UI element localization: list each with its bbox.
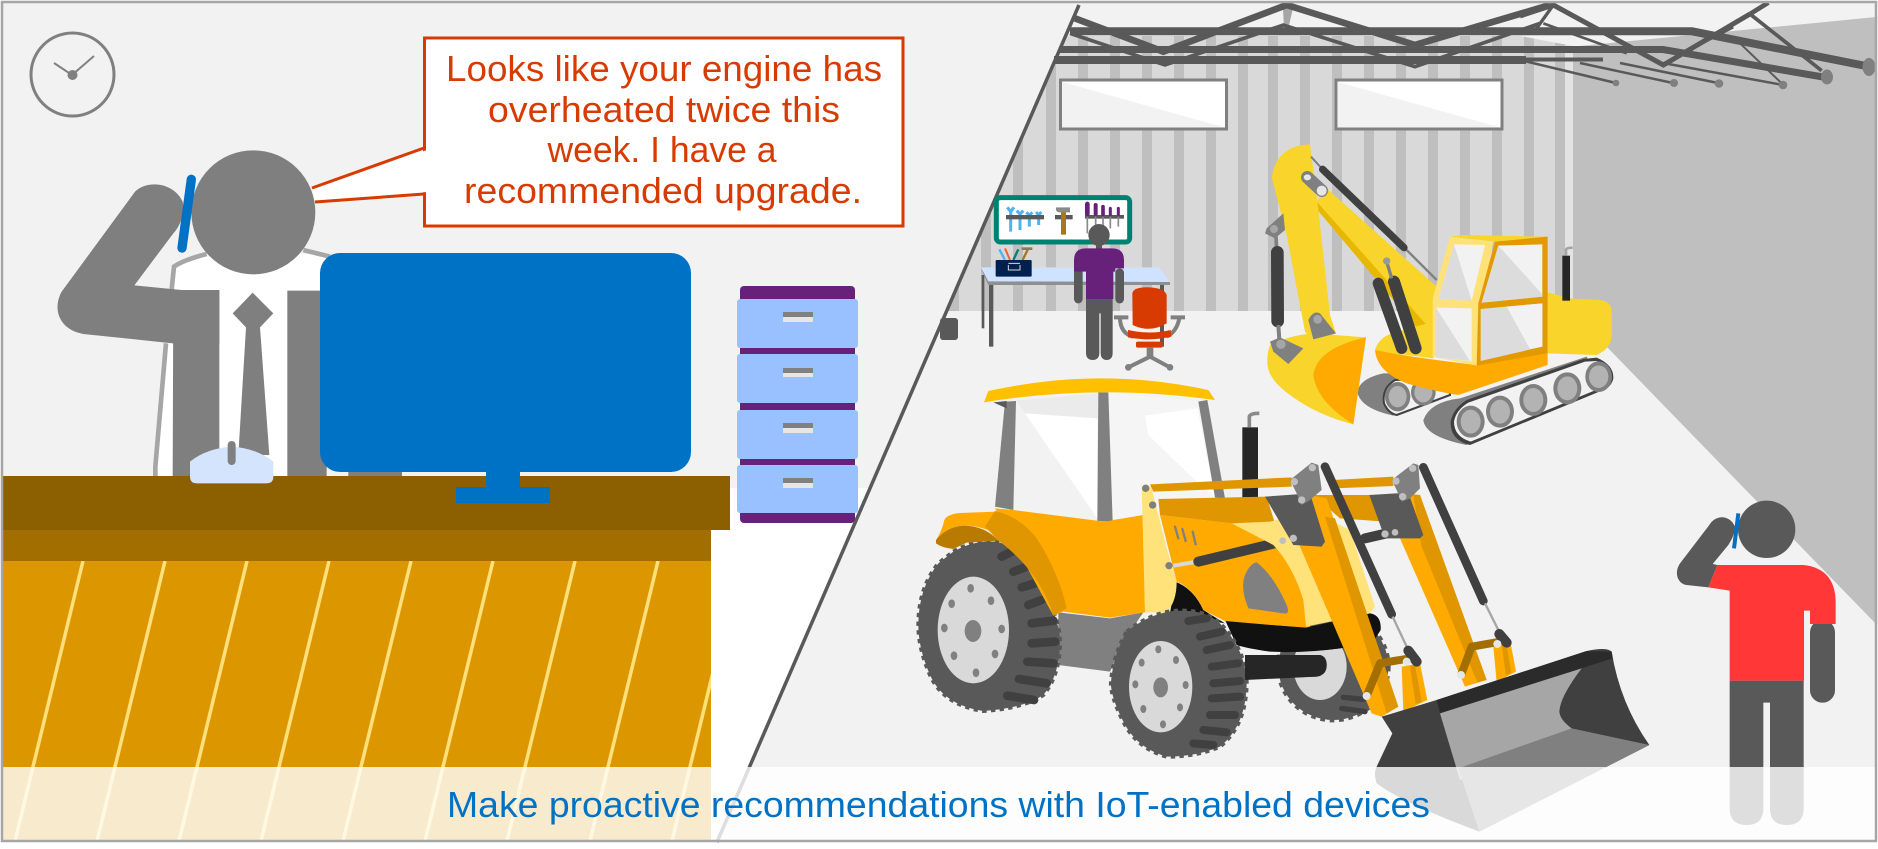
window left	[1060, 80, 1226, 129]
legs	[1730, 681, 1804, 825]
front track	[1423, 357, 1613, 445]
panel: file cabinet	[737, 286, 858, 523]
boom and arm	[1265, 144, 1437, 348]
caption band	[2, 767, 1876, 841]
raised arm	[1677, 517, 1735, 587]
icon: mouse	[190, 441, 273, 483]
caption band: Make proactive recommendations with IoT-enabled devices	[447, 784, 1430, 825]
panel: garage interior	[946, 3, 1876, 624]
head	[1738, 501, 1795, 558]
phone	[182, 179, 191, 248]
callout: Looks like your engine has	[446, 48, 882, 89]
connecting rail and beam	[1333, 477, 1393, 488]
raised arm	[58, 184, 219, 343]
red shirt	[1708, 565, 1836, 681]
cab body	[1375, 235, 1612, 395]
hood	[1142, 477, 1310, 628]
callout	[312, 38, 903, 226]
front wheel	[1111, 611, 1247, 757]
chair	[1114, 287, 1185, 371]
tool board	[996, 198, 1130, 242]
tie	[233, 293, 273, 455]
workbench scene	[981, 198, 1185, 371]
phone	[1734, 513, 1738, 548]
suit jacket	[173, 291, 327, 476]
rear fender and body	[936, 508, 1145, 618]
callout: recommended upgrade.	[464, 170, 862, 211]
right side wall	[1573, 17, 1876, 624]
toolbox	[996, 247, 1032, 277]
back wall	[946, 36, 1573, 311]
roof truss	[1054, 3, 1876, 89]
underbody	[1058, 582, 1380, 679]
loader arm near	[1265, 463, 1427, 717]
divider line	[717, 5, 1079, 842]
icon: computer monitor	[320, 253, 691, 503]
technician	[1074, 224, 1124, 360]
rear wheel	[918, 541, 1060, 711]
callout: week. I have a	[547, 129, 777, 170]
desk	[2, 476, 740, 841]
cab	[984, 378, 1225, 522]
rear track	[1357, 373, 1450, 416]
excavator	[1265, 144, 1613, 445]
front loader	[1232, 463, 1649, 832]
panel: office worker	[58, 150, 402, 476]
shirt and collar	[155, 254, 327, 476]
tire behind divider	[940, 318, 958, 340]
wall stripes	[949, 30, 1573, 311]
head	[191, 150, 315, 274]
bucket	[1267, 312, 1366, 424]
tractor with front loader	[918, 378, 1649, 832]
right arm	[1810, 620, 1835, 703]
hood highlight	[1232, 513, 1375, 627]
loader arm far	[1369, 463, 1516, 687]
person on phone	[1677, 501, 1836, 825]
exhaust stack	[1242, 413, 1259, 497]
panel: wall clock	[31, 33, 114, 116]
table	[981, 267, 1170, 347]
window right	[1336, 80, 1502, 129]
far wheel	[1278, 613, 1388, 720]
callout: overheated twice this	[488, 89, 840, 130]
loader bucket	[1375, 649, 1649, 832]
